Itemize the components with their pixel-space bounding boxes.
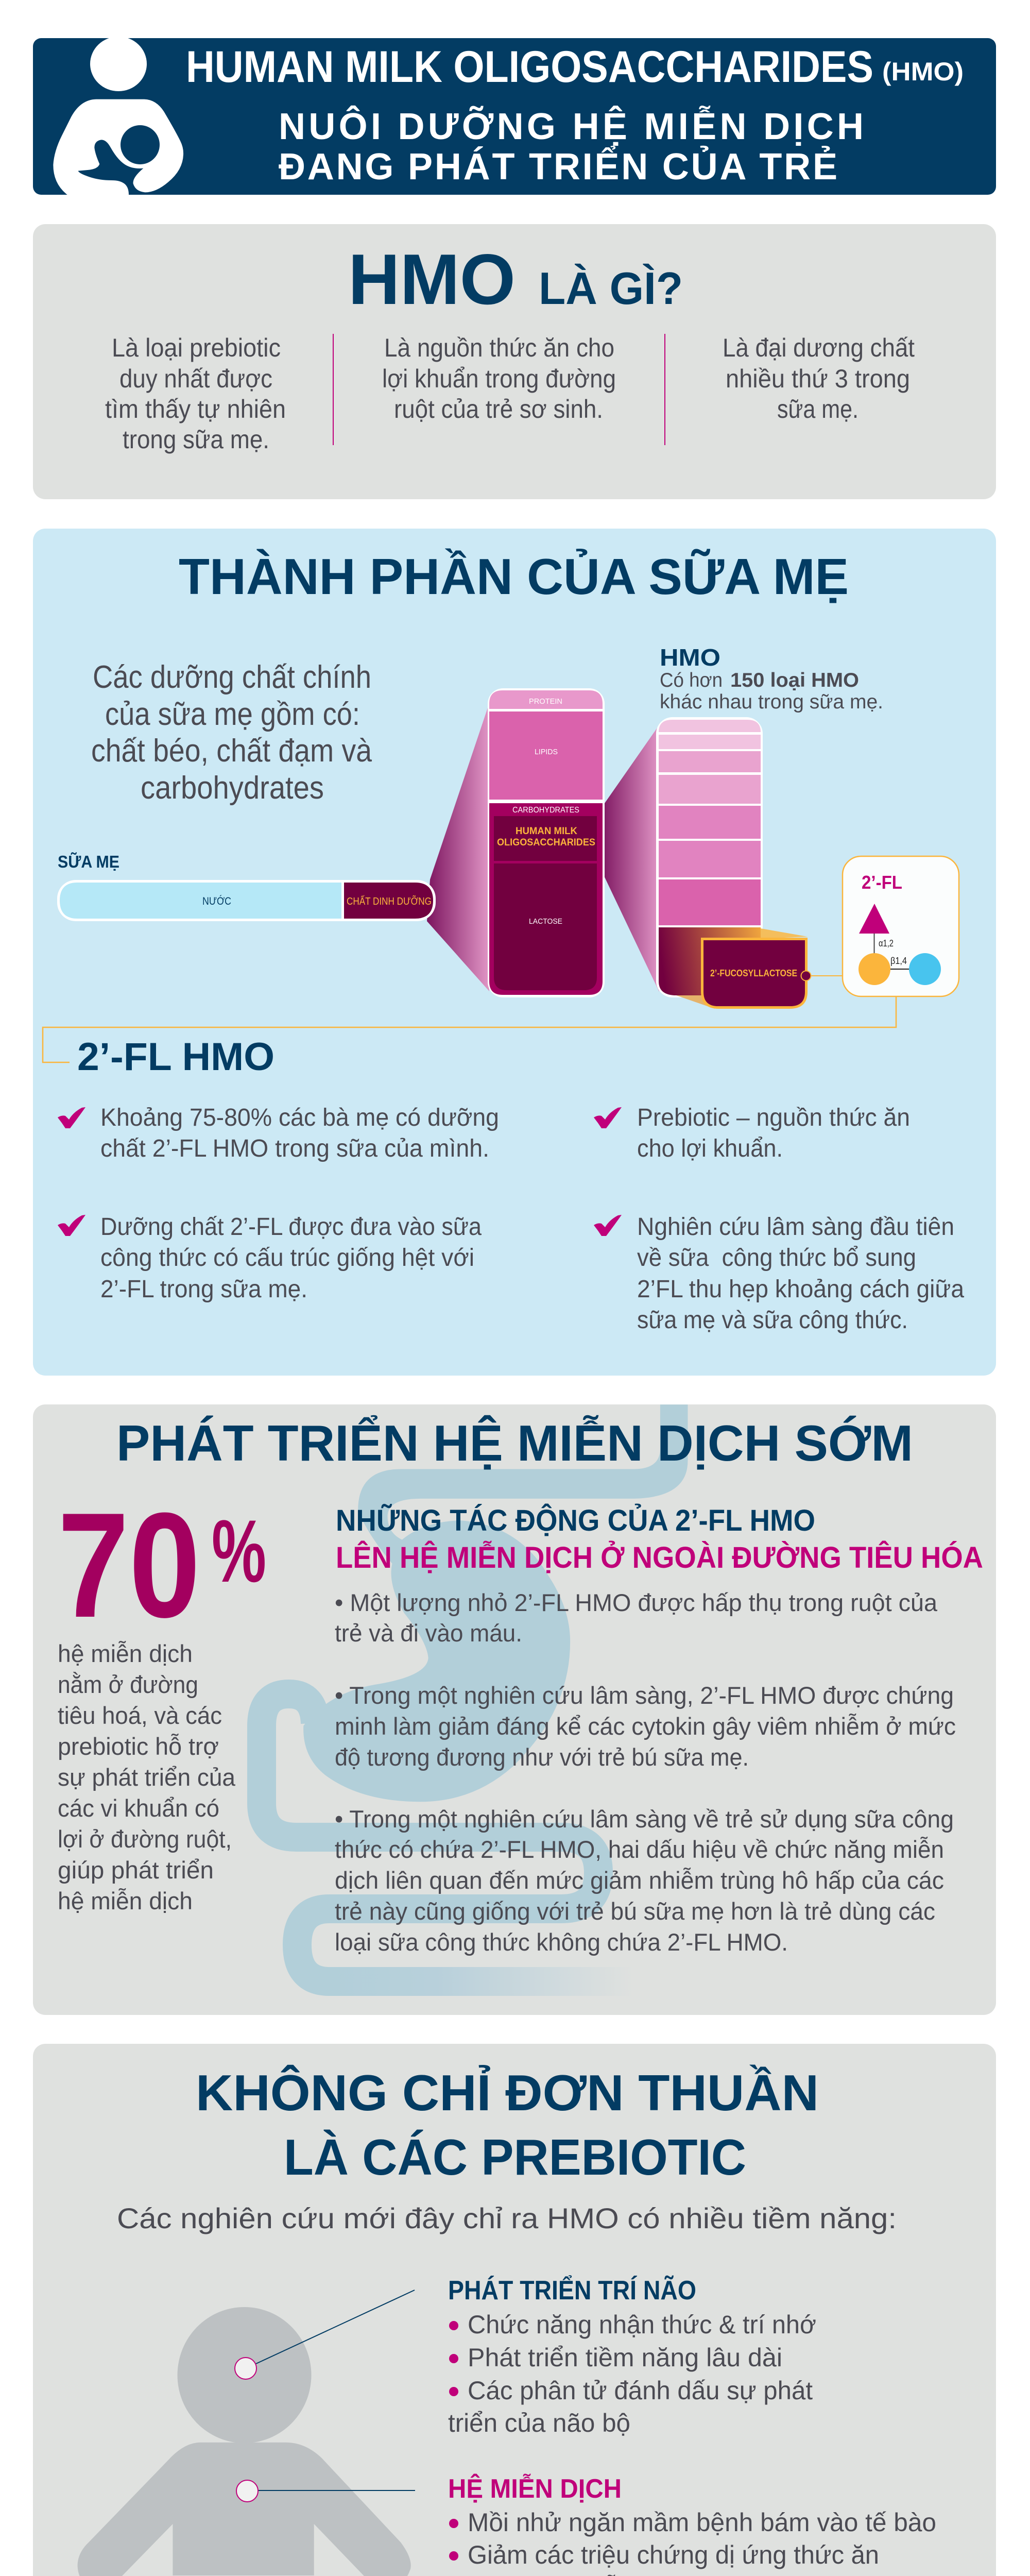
- label: HMO: khác nhau trong sữa mẹ.: [660, 691, 883, 713]
- item: 75-80% of mothers: [58, 1104, 499, 1162]
- text block: effect 3: dịch liên quan đến mức giảm nhiễm trùng hô hấp của các: [335, 1867, 944, 1894]
- heading: more than prebiotics: KHÔNG CHỈ ĐƠN THUẦN: [196, 2064, 819, 2121]
- list: immune system: HỆ MIỄN DỊCH: [448, 2473, 622, 2504]
- list: immune system: Giảm các triệu chứng dị ứng thức ăn: [468, 2540, 879, 2569]
- text block: effect 3: trẻ này cũng giống với trẻ bú sữa mẹ hơn là trẻ dùng các: [335, 1897, 935, 1925]
- list: brain development: [448, 2275, 816, 2437]
- heading: more than prebiotics: LÀ CÁC PREBIOTIC: [284, 2129, 746, 2185]
- panel: what is HMO: [33, 224, 996, 499]
- list: immune system: Mồi nhử ngăn mầm bệnh bám vào tế bào: [468, 2508, 936, 2537]
- heading: 2'-FL HMO: 2’-FL HMO: [77, 1035, 274, 1079]
- connector: bar to nutrient column: [427, 703, 489, 991]
- list: immune system: [448, 2473, 936, 2576]
- item: first clinical study: [594, 1213, 964, 1334]
- stat: 70%: %: [212, 1502, 266, 1601]
- item: prebiotic: cho lợi khuẩn.: [637, 1135, 783, 1162]
- item: identical structure: [58, 1213, 482, 1303]
- item: 75-80% of mothers: chất 2’-FL HMO trong sữa của mình.: [100, 1135, 489, 1162]
- label: HMO: 150 loại HMO: [730, 669, 859, 691]
- icon: digestive tract: [262, 1404, 688, 1981]
- stacked column: milk nutrients: [488, 688, 605, 997]
- item: prebiotic: Prebiotic – nguồn thức ăn: [637, 1104, 910, 1131]
- text block: 70% description: nằm ở đường: [58, 1671, 198, 1698]
- item: first clinical study: 2’FL thu hẹp khoảng cách giữa: [637, 1276, 964, 1303]
- stacked column: milk nutrients: HUMAN MILK: [516, 826, 577, 837]
- heading: effects of 2'-FL: NHỮNG TÁC ĐỘNG CỦA 2’-FL HMO: [336, 1504, 815, 1537]
- heading: HMO là gì: HMO: [348, 240, 516, 319]
- list: brain development: triển của não bộ: [448, 2409, 630, 2437]
- item: first clinical study: Nghiên cứu lâm sàng đầu tiên: [637, 1213, 954, 1241]
- text block: column 3: sữa mẹ.: [777, 395, 859, 423]
- panel: breast milk composition: [33, 529, 996, 1376]
- text block: effect 1: trẻ và đi vào máu.: [335, 1619, 522, 1647]
- text block: 70% description: prebiotic hỗ trợ: [58, 1733, 219, 1760]
- label: HMO: HMO: [660, 644, 720, 671]
- list: brain development: Phát triển tiềm năng lâu dài: [468, 2343, 782, 2372]
- label: breast milk: SỮA MẸ: [58, 852, 119, 871]
- text block: main nutrients: [91, 659, 372, 806]
- label: HMO: [660, 644, 883, 713]
- text block: column 3: nhiều thứ 3 trong: [726, 364, 910, 393]
- callout: 2'-fucosyllactose: 2’-FUCOSYLLACTOSE: [710, 968, 797, 978]
- intro text: Các nghiên cứu mới đây chỉ ra HMO có nhiều tiềm năng:: [117, 2202, 897, 2234]
- text block: column 1: Là loại prebiotic: [112, 333, 281, 362]
- text block: column 1: tìm thấy tự nhiên: [105, 395, 286, 423]
- marker: brain: [235, 2290, 415, 2379]
- text block: effect 2: • Trong một nghiên cứu lâm sàng, 2’-FL HMO được chứng: [335, 1682, 954, 1709]
- list: brain development: Các phân tử đánh dấu sự phát: [468, 2376, 813, 2405]
- heading: effects of 2'-FL: [336, 1504, 983, 1574]
- molecule card: 2'-FL: 2’-FL: [862, 872, 902, 893]
- heading: HMO là gì: [348, 240, 683, 319]
- molecule card: 2'-FL: α1,2: [879, 938, 894, 948]
- text block: column 2: lợi khuẩn trong đường: [382, 364, 616, 393]
- marker: immune system: [236, 2480, 415, 2502]
- stacked column: milk nutrients: PROTEIN: [529, 697, 562, 706]
- title line 1: (HMO): [882, 57, 964, 86]
- text block: effect 1: • Một lượng nhỏ 2’-FL HMO được hấp thụ trong ruột của: [335, 1589, 938, 1616]
- text block: 70% description: [58, 1640, 236, 1914]
- molecule card: 2'-FL: β1,4: [890, 956, 907, 966]
- bar: water and nutrients: CHẤT DINH DƯỠNG: [347, 895, 432, 907]
- title line 2: NUÔI DƯỠNG HỆ MIỄN DỊCH: [279, 106, 864, 147]
- text block: main nutrients: Các dưỡng chất chính: [93, 659, 371, 695]
- text block: column 2: [382, 333, 616, 423]
- molecule card: 2'-FL: [843, 856, 959, 996]
- text block: effect 3: • Trong một nghiên cứu lâm sàng về trẻ sử dụng sữa công: [335, 1805, 954, 1833]
- title line 1: HUMAN MILK OLIGOSACCHARIDES: [186, 42, 873, 92]
- header banner: [33, 37, 996, 195]
- connector: nutrient column to HMO column: [600, 726, 659, 992]
- text block: column 1: trong sữa mẹ.: [123, 425, 269, 454]
- text block: column 2: ruột của trẻ sơ sinh.: [394, 395, 603, 423]
- text block: column 3: [723, 333, 915, 423]
- stacked column: milk nutrients: LIPIDS: [535, 748, 558, 756]
- text block: column 2: Là nguồn thức ăn cho: [384, 333, 614, 362]
- text block: 70% description: các vi khuẩn có: [58, 1794, 219, 1822]
- text block: 70% description: sự phát triển của: [58, 1764, 236, 1791]
- text block: effect 3: [335, 1805, 954, 1956]
- heading: early immune development: PHÁT TRIỂN HỆ MIỄN DỊCH SỚM: [116, 1415, 913, 1471]
- item: first clinical study: về sữa công thức bổ sung: [637, 1244, 916, 1272]
- heading: composition: THÀNH PHẦN CỦA SỮA MẸ: [179, 548, 849, 605]
- text block: main nutrients: carbohydrates: [141, 770, 324, 806]
- item: prebiotic: [594, 1104, 910, 1162]
- text block: main nutrients: của sữa mẹ gồm có:: [105, 697, 360, 732]
- stacked column: milk nutrients: LACTOSE: [529, 917, 562, 926]
- text block: main nutrients: chất béo, chất đạm và: [91, 733, 372, 769]
- panel: early immune development: [33, 1404, 996, 2015]
- icon: baby silhouette: [78, 2307, 411, 2576]
- stacked column: milk nutrients: CARBOHYDRATES: [512, 806, 579, 815]
- arrow: connector to 2'-FL section: [43, 996, 896, 1062]
- item: identical structure: Dưỡng chất 2’-FL được đưa vào sữa: [100, 1213, 482, 1241]
- text block: 70% description: hệ miễn dịch: [58, 1640, 193, 1667]
- bar: water and nutrients: [57, 880, 436, 921]
- text block: 70% description: tiêu hoá, và các: [58, 1702, 222, 1729]
- text block: effect 2: độ tương đương như với trẻ bú sữa mẹ.: [335, 1743, 749, 1771]
- text block: effect 1: [335, 1589, 938, 1647]
- text block: column 1: [105, 333, 286, 454]
- title line 3: ĐANG PHÁT TRIỂN CỦA TRẺ: [279, 146, 837, 188]
- text block: effect 2: minh làm giảm đáng kể các cytokin gây viêm nhiễm ở mức: [335, 1713, 956, 1740]
- item: identical structure: công thức có cấu trúc giống hệt với: [100, 1244, 474, 1272]
- text block: 70% description: giúp phát triển: [58, 1856, 214, 1884]
- item: first clinical study: sữa mẹ và sữa công thức.: [637, 1307, 908, 1334]
- heading: HMO là gì: LÀ GÌ?: [539, 263, 683, 314]
- panel: more than prebiotics: [33, 2044, 996, 2576]
- heading: effects of 2'-FL: LÊN HỆ MIỄN DỊCH Ở NGOÀI ĐƯỜNG TIÊU HÓA: [336, 1541, 983, 1574]
- callout: 2'-fucosyllactose: [676, 928, 843, 1009]
- text block: column 1: duy nhất được: [119, 364, 272, 393]
- stacked column: milk nutrients: OLIGOSACCHARIDES: [497, 837, 595, 848]
- list: brain development: PHÁT TRIỂN TRÍ NÃO: [448, 2275, 696, 2306]
- label: HMO: Có hơn: [660, 669, 723, 691]
- stacked column: HMO types: [656, 717, 763, 997]
- text block: effect 2: [335, 1682, 956, 1771]
- item: identical structure: 2’-FL trong sữa mẹ.: [100, 1276, 307, 1303]
- text block: column 3: Là đại dương chất: [723, 333, 915, 362]
- bar: water and nutrients: NƯỚC: [202, 895, 231, 907]
- text block: 70% description: hệ miễn dịch: [58, 1887, 193, 1914]
- icon: breastfeeding mother: [53, 37, 183, 195]
- text block: 70% description: lợi ở đường ruột,: [58, 1825, 232, 1853]
- stat: 70%: 70: [58, 1482, 200, 1649]
- text block: effect 3: thức có chứa 2’-FL HMO, hai dấu hiệu về chức năng miễn: [335, 1836, 944, 1863]
- item: 75-80% of mothers: Khoảng 75-80% các bà mẹ có dưỡng: [100, 1104, 499, 1131]
- text block: effect 3: loại sữa công thức không chứa 2’-FL HMO.: [335, 1928, 788, 1956]
- heading: more than prebiotics: [196, 2064, 819, 2185]
- list: brain development: Chức năng nhận thức & trí nhớ: [468, 2310, 816, 2339]
